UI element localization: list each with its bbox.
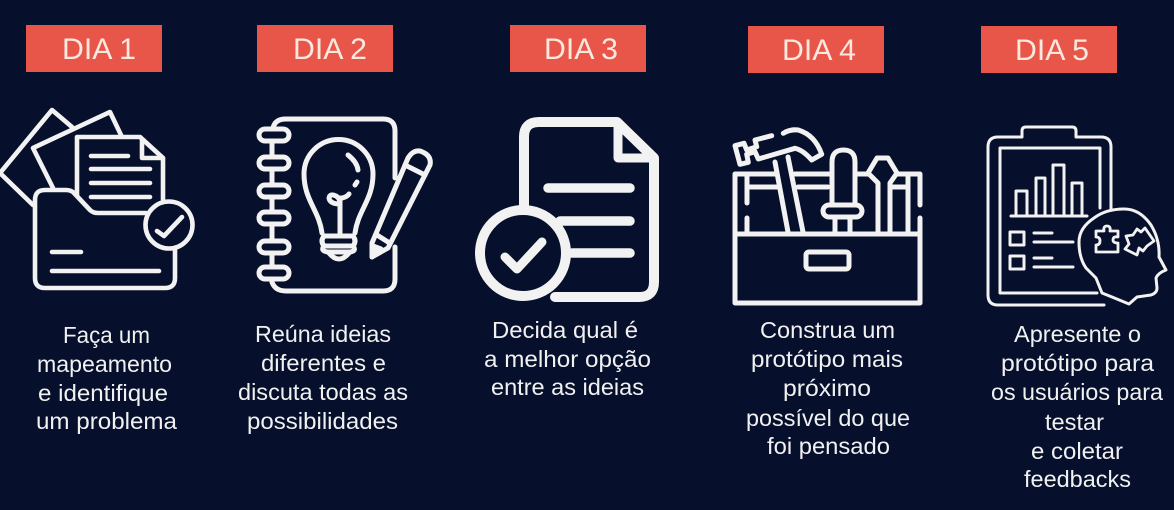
panel: dia 4 [735, 26, 920, 459]
text: dia 3: a melhor opção [484, 346, 651, 372]
heading: dia 1 [26, 25, 162, 72]
text: dia 4: próximo [783, 375, 871, 401]
text: dia 1: mapeamento [37, 351, 172, 377]
text: dia 4 [746, 317, 910, 459]
text: dia 1: um problema [36, 408, 177, 434]
text: dia 2 [238, 321, 408, 434]
text: dia 1: e identifique [38, 380, 168, 406]
text: dia 5: e coletar [1031, 438, 1123, 464]
text: dia 5: os usuários para [991, 379, 1163, 405]
text: dia 4: protótipo mais [751, 346, 903, 372]
text: dia 3 [484, 317, 651, 400]
heading: dia 3: DIA 3 [544, 33, 618, 66]
text: dia 4: possível do que [746, 405, 910, 431]
icon: notebook with light bulb and pencil [259, 119, 430, 291]
text: dia 2: diferentes e [261, 350, 386, 376]
panel: dia 3 [480, 25, 654, 400]
text: dia 1: Faça um [63, 322, 150, 348]
heading: dia 5 [981, 26, 1117, 73]
text: dia 2: possibilidades [247, 408, 398, 434]
heading: dia 4 [748, 26, 884, 73]
text: dia 5: protótipo para [1001, 350, 1154, 376]
text: dia 5: Apresente o [1014, 321, 1141, 347]
panel: dia 1 [0, 25, 192, 434]
text: dia 5 [991, 321, 1163, 492]
icon: clipboard with chart and head [988, 127, 1166, 305]
text: dia 2: discuta todas as [238, 379, 408, 405]
panel: dia 2 [238, 25, 430, 434]
icon: folder with documents [0, 110, 192, 288]
heading: dia 3 [510, 25, 646, 72]
text: dia 1 [36, 322, 177, 434]
heading: dia 2 [257, 25, 393, 72]
text: dia 5: testar [1045, 409, 1104, 435]
heading: dia 2: DIA 2 [293, 33, 367, 66]
text: dia 5: feedbacks [1024, 466, 1131, 492]
heading: dia 4: DIA 4 [782, 34, 856, 67]
text: dia 4: Construa um [760, 317, 895, 343]
heading: dia 1: DIA 1 [62, 33, 136, 66]
icon: toolbox [735, 130, 920, 303]
text: dia 3: Decida qual é [492, 317, 638, 343]
text: dia 2: Reúna ideias [255, 321, 391, 347]
heading: dia 5: DIA 5 [1015, 34, 1089, 67]
text: dia 4: foi pensado [767, 433, 890, 459]
icon: document with check mark [480, 122, 654, 297]
text: dia 3: entre as ideias [491, 374, 644, 400]
panel: dia 5 [981, 26, 1166, 492]
